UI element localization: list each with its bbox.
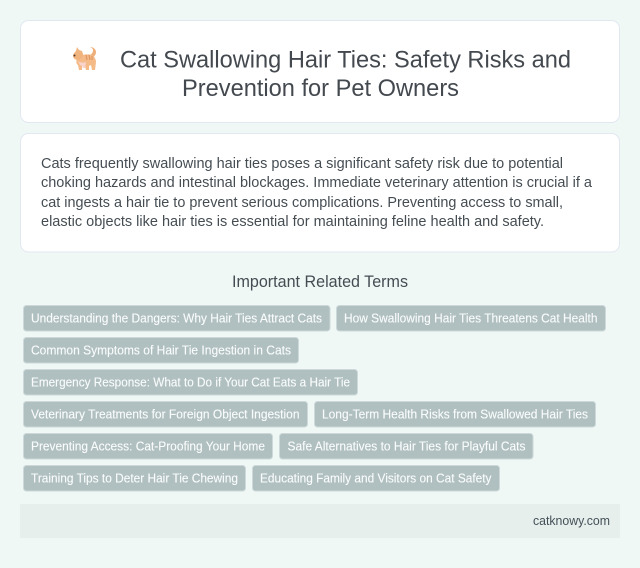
tag: [24, 306, 330, 331]
tag: [24, 370, 358, 395]
tag: [24, 466, 246, 491]
icon: cat: [73, 47, 96, 70]
heading: related terms: Important Related Terms: [232, 273, 408, 291]
tag: Educating Family and Visitors on Cat Safety: [260, 470, 492, 486]
panel: description: [20, 134, 620, 252]
tag: [336, 306, 606, 331]
description text: Cats frequently swallowing hair ties poses a significant safety risk due to potential: [41, 155, 563, 172]
tag: [252, 466, 500, 491]
tag: Emergency Response: What to Do if Your Cat Eats a Hair Tie: [31, 374, 350, 390]
panel: title card: [20, 20, 620, 122]
tag: Safe Alternatives to Hair Ties for Playful Cats: [288, 438, 526, 454]
footer: [20, 504, 620, 538]
tag: Veterinary Treatments for Foreign Object Ingestion: [31, 406, 300, 422]
tag: Understanding the Dangers: Why Hair Ties Attract Cats: [31, 310, 322, 326]
tag: Long-Term Health Risks from Swallowed Hair Ties: [322, 406, 588, 422]
tag list: [24, 306, 606, 491]
tag: [24, 434, 272, 459]
tag: How Swallowing Hair Ties Threatens Cat Health: [344, 310, 598, 326]
description text: elastic objects like hair ties is essential for maintaining feline health and safety.: [41, 213, 544, 230]
tag: [280, 434, 533, 459]
tag: [314, 402, 596, 427]
description text: [41, 155, 593, 230]
title: Cat Swallowing Hair Ties: Safety Risks and: [120, 46, 571, 74]
tag: [24, 338, 298, 363]
title: [120, 46, 571, 102]
description text: choking hazards and intestinal blockages. Immediate veterinary attention is crucial if a: [41, 174, 593, 191]
tag: Preventing Access: Cat-Proofing Your Home: [31, 438, 265, 454]
description text: cat ingests a hair tie to prevent serious complications. Preventing access to small,: [41, 194, 563, 211]
tag: Common Symptoms of Hair Tie Ingestion in Cats: [31, 342, 291, 358]
tag: [24, 402, 308, 427]
footer: catknowy.com: [533, 514, 610, 528]
tag: Training Tips to Deter Hair Tie Chewing: [31, 470, 238, 486]
title: Prevention for Pet Owners: [182, 75, 459, 102]
